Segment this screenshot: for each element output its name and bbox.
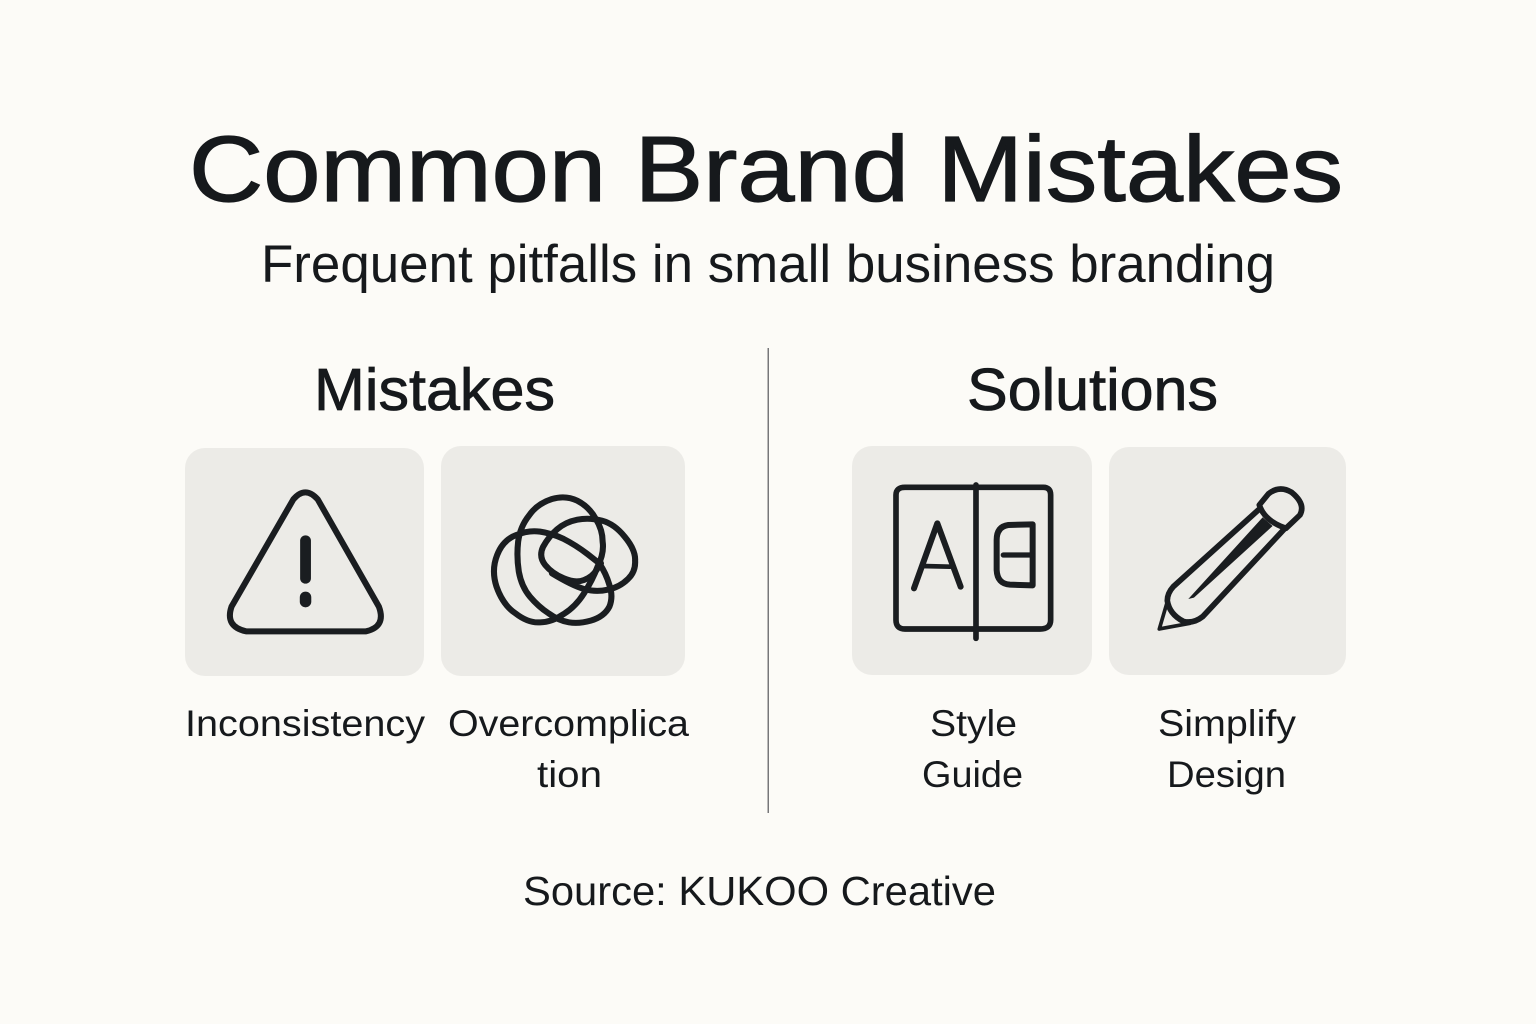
panel: mistakes	[185, 357, 689, 795]
icon: warning triangle	[230, 492, 381, 631]
divider	[768, 348, 769, 813]
label: overcomplication	[448, 703, 689, 795]
card: simplify design	[1109, 447, 1346, 675]
card: inconsistency	[185, 448, 424, 676]
label: simplify design: Simplify	[1158, 703, 1297, 744]
label: overcomplication: tion	[537, 754, 602, 795]
label: overcomplication: Overcomplica	[448, 703, 689, 744]
icon: tangled scribble	[494, 497, 635, 623]
heading: mistakes: Mistakes	[314, 357, 555, 423]
label: inconsistency: Inconsistency	[185, 703, 426, 744]
label: style guide: Style	[930, 703, 1017, 744]
label: simplify design: Design	[1167, 754, 1286, 795]
card: overcomplication	[441, 446, 685, 676]
label: simplify design	[1158, 703, 1297, 795]
heading: solutions: Solutions	[967, 357, 1218, 423]
card: style guide	[852, 446, 1092, 675]
label: style guide: Guide	[922, 754, 1023, 795]
title: Common Brand Mistakes	[189, 117, 1343, 221]
icon: open book with letters	[896, 485, 1051, 638]
panel: solutions	[852, 357, 1346, 795]
icon: pencil	[1159, 489, 1302, 629]
label: style guide	[922, 703, 1023, 795]
source line: Source: KUKOO Creative	[523, 868, 996, 914]
subtitle: Frequent pitfalls in small business branding	[261, 235, 1275, 294]
